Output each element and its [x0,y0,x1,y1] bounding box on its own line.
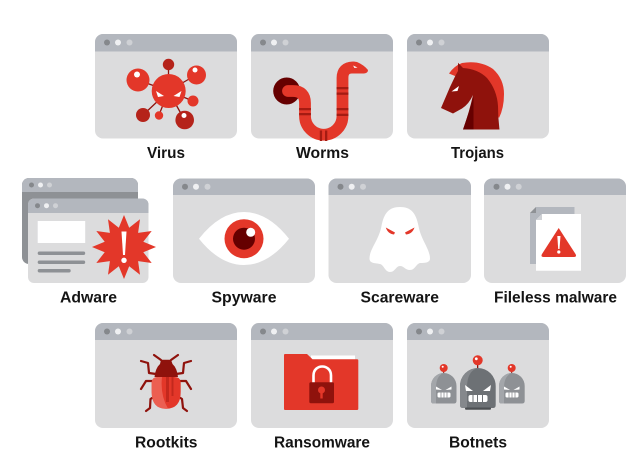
label: trojans: Trojans [451,145,504,162]
label: scareware: Scareware [360,290,439,306]
panel: virus [95,34,237,162]
panel: worms [251,34,393,162]
panel: spyware [173,178,315,306]
label: fileless malware: Fileless malware [494,290,617,306]
icon: eye [199,212,289,265]
panel: trojans [407,34,549,162]
front window [28,198,148,283]
panel: fileless malware [484,178,626,306]
icon: worm [273,62,368,141]
icon: warning starburst [92,215,156,279]
icon: bug [141,355,191,411]
label: botnets: Botnets [449,434,507,452]
icon: virus [126,59,206,129]
label: adware: Adware [60,290,117,306]
icon: ghost [370,207,430,272]
panel: ransomware [251,323,393,452]
panel: botnets [407,323,549,452]
label: spyware: Spyware [212,290,277,306]
panel: rootkits [95,323,237,452]
panel: adware [22,178,156,306]
icon: botnet robots [431,355,525,410]
right bot [499,364,525,404]
back window [22,178,138,264]
label: ransomware: Ransomware [274,434,370,452]
icon: locked folder [284,354,358,410]
label: virus: Virus [147,145,185,162]
icon: files with warning [530,207,581,271]
panel: scareware [328,178,471,306]
center bot [460,355,496,410]
icon: trojan horse [441,62,504,130]
left bot [431,364,456,404]
label: rootkits: Rootkits [135,434,198,452]
label: worms: Worms [296,145,349,162]
